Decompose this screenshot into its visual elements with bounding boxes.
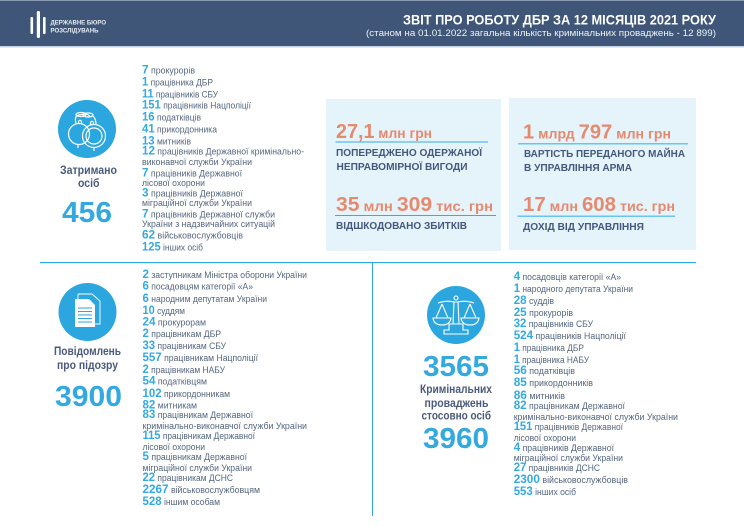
list: detained breakdown: України з надзвичайних ситуацій: [142, 219, 275, 229]
heading: criminal proceedings: [420, 384, 493, 422]
list: suspicion breakdown: 2 працівникам НАБУ: [142, 362, 225, 376]
list: suspicion breakdown: 82 митникам: [142, 398, 197, 412]
list: proceedings breakdown: 56 податківців: [514, 363, 575, 377]
list: suspicion breakdown: 6 народним депутатам України: [142, 291, 267, 305]
list: detained breakdown: 16 податківців: [142, 110, 201, 124]
title: ЗВІТ ПРО РОБОТУ ДБР ЗА 12 МІСЯЦІВ 2021 РОКУ: [403, 12, 716, 28]
logo: РОЗСЛІДУВАНЬ: [50, 28, 99, 34]
subtitle: (станом на 01.01.2022 загальна кількість кримінальних проваджень - 12 899): [366, 28, 716, 39]
list: suspicion breakdown: 2267 військовослужбовцям: [142, 482, 260, 496]
icon: handcuffs: [58, 100, 116, 158]
list: suspicion breakdown: міграційної служби України: [142, 463, 252, 473]
stat: 17 million: 17 млн 608 тис. грн: [523, 194, 675, 216]
list: detained breakdown: 3 працівників Державної: [142, 186, 243, 200]
heading: notices of suspicion: про підозру: [57, 360, 119, 372]
list: detained breakdown: лісової охорони: [142, 178, 205, 188]
logo: [30, 11, 106, 38]
list: detained breakdown: 151 працівників Нацполіції: [142, 98, 251, 112]
caption: prevented benefit: НЕПРАВОМІРНОЇ ВИГОДИ: [336, 160, 468, 173]
heading: detained: Затримано: [60, 165, 117, 177]
heading: detained: [60, 165, 117, 190]
heading: notices of suspicion: Повідомлень: [54, 346, 121, 358]
list: detained breakdown: 12 працівників Державної кримінально-: [142, 144, 304, 158]
list: suspicion breakdown: 24 прокурорам: [142, 314, 206, 328]
stat: 27,1 million: 27,1 млн грн: [336, 121, 432, 143]
list: suspicion breakdown: 102 прикордонникам: [142, 386, 230, 400]
list: proceedings breakdown: 85 прикордонників: [514, 375, 593, 389]
list: suspicion breakdown: 528 іншим особам: [142, 494, 220, 508]
list: suspicion breakdown: 33 працівникам СБУ: [142, 338, 226, 352]
caption: asset value: [524, 147, 685, 174]
list: suspicion breakdown: [142, 267, 307, 508]
list: detained breakdown: [142, 62, 304, 254]
list: proceedings breakdown: 4 посадовців категорії «А»: [514, 269, 621, 283]
heading: criminal proceedings: Кримінальних: [420, 384, 493, 396]
heading: notices of suspicion: [54, 346, 121, 372]
list: suspicion breakdown: 83 працівникам Державної: [142, 407, 253, 421]
list: detained breakdown: 7 прокурорів: [142, 62, 195, 76]
panel: transferred assets and income: [509, 98, 696, 250]
stat: 35 million: 35 млн 309 тис. грн: [336, 194, 493, 216]
list: suspicion breakdown: 2 працівникам ДБР: [142, 326, 221, 340]
list: suspicion breakdown: 115 працівникам Державної: [142, 428, 255, 442]
list: suspicion breakdown: 6 посадовцям категорії «А»: [142, 278, 253, 292]
list: proceedings breakdown: 28 суддів: [514, 293, 554, 307]
heading: criminal proceedings: стосовно осіб: [422, 410, 491, 422]
caption: asset value: ВАРТІСТЬ ПЕРЕДАНОГО МАЙНА: [524, 147, 685, 160]
list: proceedings breakdown: лісової охорони: [514, 433, 576, 443]
list: detained breakdown: 7 працівників Державної служби: [142, 206, 275, 220]
list: proceedings breakdown: 86 митників: [514, 388, 565, 402]
icon: documents: [58, 283, 116, 341]
list: proceedings breakdown: 4 працівників Державної: [514, 440, 614, 454]
list: proceedings breakdown: 32 працівників СБУ: [514, 316, 593, 330]
panel: criminal proceedings: [420, 269, 678, 498]
list: detained breakdown: 41 прикордонника: [142, 122, 217, 136]
list: proceedings breakdown: 524 працівників Нацполіції: [514, 328, 626, 342]
number: 456: 456: [62, 197, 112, 229]
list: detained breakdown: виконавчої служби України: [142, 157, 252, 167]
list: detained breakdown: 125 інших осіб: [142, 240, 203, 254]
list: proceedings breakdown: 151 працівників Державної: [514, 419, 623, 433]
list: proceedings breakdown: 27 працівників ДСНС: [514, 460, 600, 474]
stat: 1 billion: 1 млрд 797 млн грн: [523, 122, 671, 144]
list: suspicion breakdown: 22 працівникам ДСНС: [142, 470, 233, 484]
list: suspicion breakdown: 54 податківцям: [142, 374, 207, 388]
caption: asset value: В УПРАВЛІННЯ АРМА: [524, 162, 632, 174]
icon: scales: [427, 286, 485, 344]
list: detained breakdown: 62 військовослужбовців: [142, 228, 243, 242]
list: proceedings breakdown: 1 працівника НАБУ: [514, 352, 589, 366]
list: proceedings breakdown: 82 працівникам Державної: [514, 398, 625, 412]
list: suspicion breakdown: 2 заступникам Міністра оборони України: [142, 267, 307, 281]
list: suspicion breakdown: 557 працівникам Нацполіції: [142, 350, 258, 364]
panel: prevented benefit and damages: [326, 99, 501, 251]
list: proceedings breakdown: 25 прокурорів: [514, 305, 573, 319]
list: proceedings breakdown: міграційної служби України: [514, 453, 623, 463]
heading: criminal proceedings: проваджень: [424, 398, 488, 410]
list: detained breakdown: 13 митників: [142, 134, 191, 148]
list: suspicion breakdown: 5 працівникам Державної: [142, 449, 247, 463]
list: detained breakdown: 11 працівників СБУ: [142, 86, 218, 100]
list: proceedings breakdown: 1 народного депутата України: [514, 281, 633, 295]
number: 3960: 3960: [423, 423, 489, 455]
list: proceedings breakdown: 1 працівника ДБР: [514, 340, 584, 354]
caption: damages compensated: ВІДШКОДОВАНО ЗБИТКІВ: [336, 220, 467, 232]
logo: ДЕРЖАВНЕ БЮРО: [50, 20, 106, 26]
list: detained breakdown: міграційної служби України: [142, 198, 252, 208]
panel: notices of suspicion: [54, 267, 307, 508]
number: 3900: 3900: [55, 381, 122, 413]
header band: [0, 0, 744, 46]
caption: prevented benefit: [336, 146, 483, 173]
list: suspicion breakdown: лісової охорони: [142, 442, 205, 452]
caption: prevented benefit: ПОПЕРЕДЖЕНО ОДЕРЖАНОЇ: [336, 146, 483, 159]
heading: detained: осіб: [78, 178, 100, 190]
number: 3565: 3565: [423, 351, 489, 383]
list: suspicion breakdown: 10 суддям: [142, 303, 185, 317]
list: detained breakdown: 7 працівників Державної: [142, 166, 242, 180]
panel: detained: [58, 62, 304, 254]
list: proceedings breakdown: 2300 військовослужбовців: [514, 472, 628, 486]
list: proceedings breakdown: [514, 269, 678, 498]
caption: income: ДОХІД ВІД УПРАВЛІННЯ: [523, 221, 644, 233]
list: proceedings breakdown: 553 інших осіб: [514, 484, 576, 498]
list: detained breakdown: 1 працівника ДБР: [142, 74, 213, 88]
list: proceedings breakdown: кримінально-виконавчої служби України: [514, 412, 678, 422]
list: suspicion breakdown: кримінально-виконавчої служби України: [142, 421, 307, 431]
